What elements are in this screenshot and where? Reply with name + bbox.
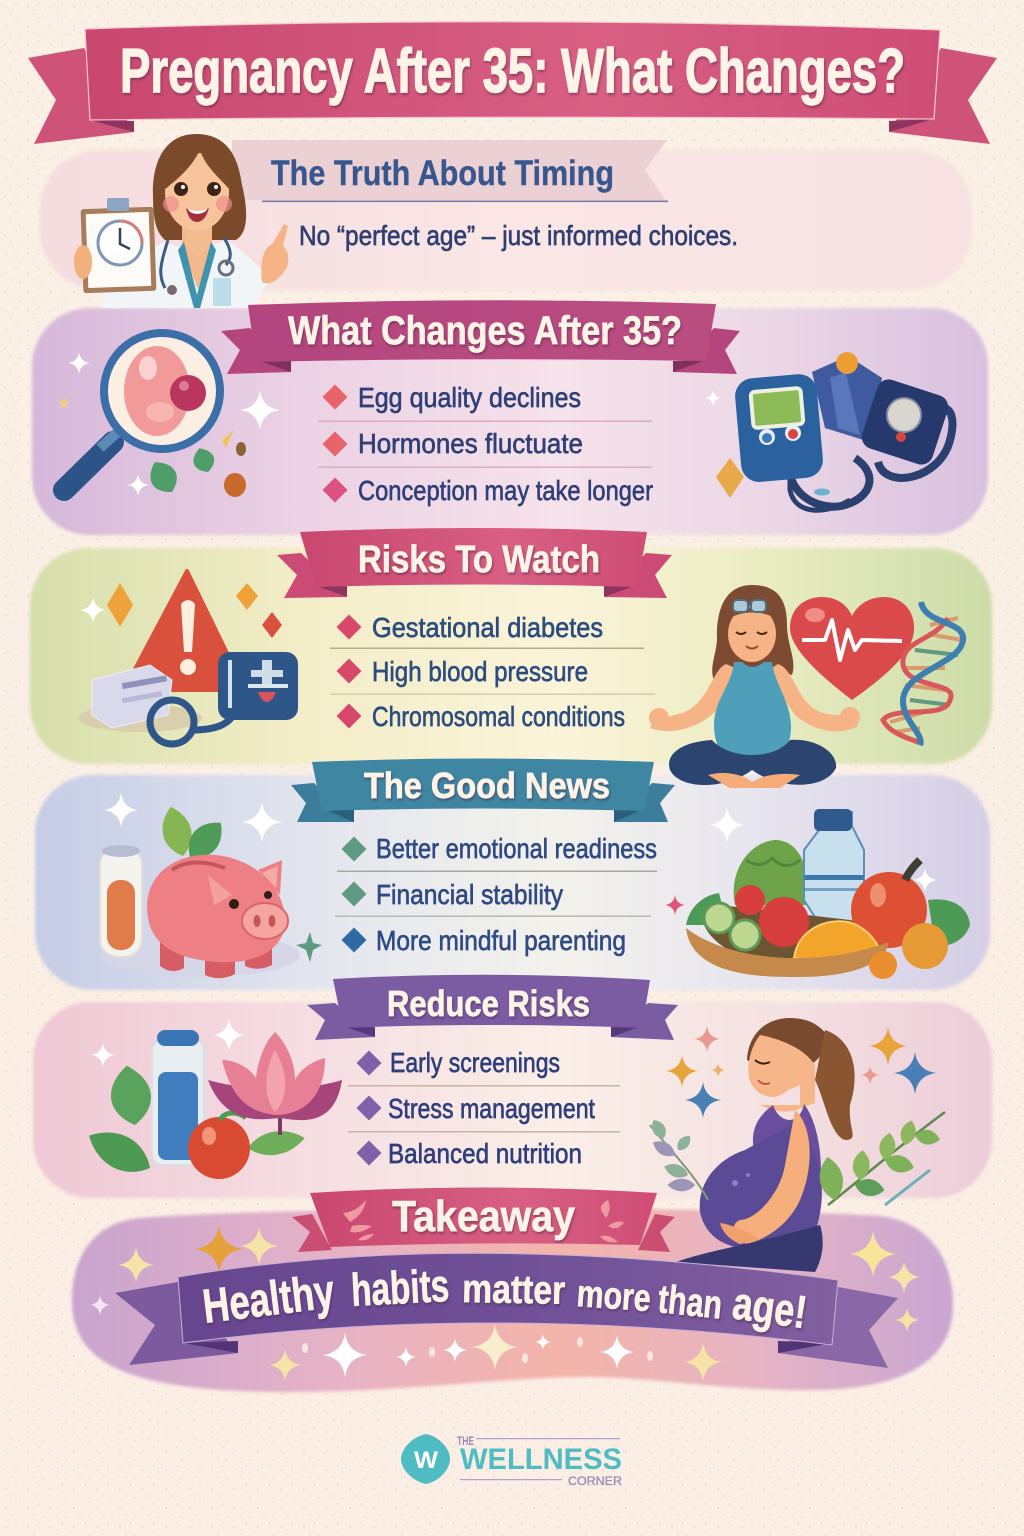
bullet list: Balanced nutrition	[388, 1138, 582, 1169]
bullet list: Better emotional readiness	[376, 833, 657, 864]
ribbon heading	[277, 528, 672, 598]
panel: good news background	[35, 775, 990, 990]
message text: Healthy	[200, 1265, 338, 1334]
bullet list: Financial stability	[376, 879, 563, 910]
bullet list: Conception may take longer	[358, 475, 653, 506]
panel: takeaway background	[72, 1209, 953, 1392]
bullet list: Egg quality declines	[358, 382, 581, 413]
bullet list	[330, 612, 655, 732]
ribbon heading	[291, 758, 675, 822]
bullet list: Chromosomal conditions	[372, 701, 625, 732]
ribbon heading: Reduce Risks	[387, 983, 590, 1024]
logo: the wellness corner	[401, 1434, 622, 1488]
message text: more	[575, 1273, 652, 1320]
sparkle decorations	[90, 1225, 920, 1381]
bullet list	[318, 382, 653, 506]
section: takeaway	[90, 1188, 920, 1381]
icon: water bottle, lotus, tomato and mint	[81, 1019, 342, 1183]
message text	[200, 1259, 810, 1338]
message text: than	[656, 1277, 724, 1328]
section: the good news	[100, 758, 970, 979]
ribbon heading	[221, 300, 740, 374]
title banner	[28, 22, 997, 144]
icon: pregnant woman in profile	[648, 1018, 945, 1272]
logo: the wellness corner: WELLNESS	[460, 1443, 622, 1476]
logo: the wellness corner: CORNER	[568, 1474, 622, 1488]
ribbon heading	[307, 975, 678, 1040]
icon: DNA helix	[883, 602, 963, 745]
icon: fruit bowl with water bottle	[665, 807, 970, 979]
message text: matter	[462, 1267, 566, 1313]
icon: doctor with clock clipboard	[74, 134, 288, 308]
message text: age!	[730, 1276, 810, 1338]
message text: habits	[350, 1259, 450, 1316]
bullet list: More mindful parenting	[376, 925, 626, 956]
bullet list	[348, 1047, 620, 1169]
icon: warning triangle and medical kit	[78, 571, 298, 744]
icon: sparkles around woman	[666, 1026, 936, 1118]
bullet list: Gestational diabetes	[372, 612, 603, 643]
icon: heart with heartbeat line	[790, 597, 914, 700]
right ribbon tail	[889, 48, 997, 144]
panel: risks background	[30, 548, 992, 764]
logo: the wellness corner: W	[414, 1447, 438, 1474]
section: what changes after 35	[57, 300, 953, 510]
bullet list: Stress management	[388, 1093, 595, 1124]
section: risks to watch	[78, 528, 963, 788]
takeaway heading ribbon	[292, 1188, 675, 1252]
takeaway heading ribbon: Takeaway	[392, 1192, 575, 1241]
ribbon heading: Risks To Watch	[358, 539, 600, 581]
ribbon heading: What Changes After 35?	[288, 309, 682, 353]
panel: truth about timing background	[40, 150, 972, 290]
section: reduce risks	[81, 975, 945, 1272]
bullet list	[335, 833, 657, 956]
heading: The Truth About Timing	[271, 154, 614, 193]
heading ribbon	[232, 140, 667, 200]
panel: what changes background	[32, 308, 988, 535]
message ribbon	[115, 1253, 898, 1368]
icon: magnifier over egg cell	[57, 333, 280, 499]
left ribbon tail	[28, 48, 134, 144]
panel: reduce risks background	[33, 1002, 992, 1198]
icon: piggy bank with test tube and leaves	[100, 793, 322, 978]
bullet list: Early screenings	[390, 1047, 560, 1078]
icon: meditating pregnant woman	[649, 585, 860, 788]
ribbon heading: The Good News	[364, 765, 610, 806]
logo: the wellness corner: THE	[457, 1434, 474, 1448]
bullet list: High blood pressure	[372, 656, 588, 687]
icon: right branch	[816, 1112, 945, 1205]
bullet list: Hormones fluctuate	[358, 428, 583, 459]
tagline text: No “perfect age” – just informed choices.	[299, 220, 738, 251]
icon: left branch	[648, 1117, 708, 1200]
section: the truth about timing	[74, 134, 738, 308]
icon: blood pressure monitor and glucose meter	[705, 352, 953, 510]
logo mark	[401, 1434, 450, 1484]
